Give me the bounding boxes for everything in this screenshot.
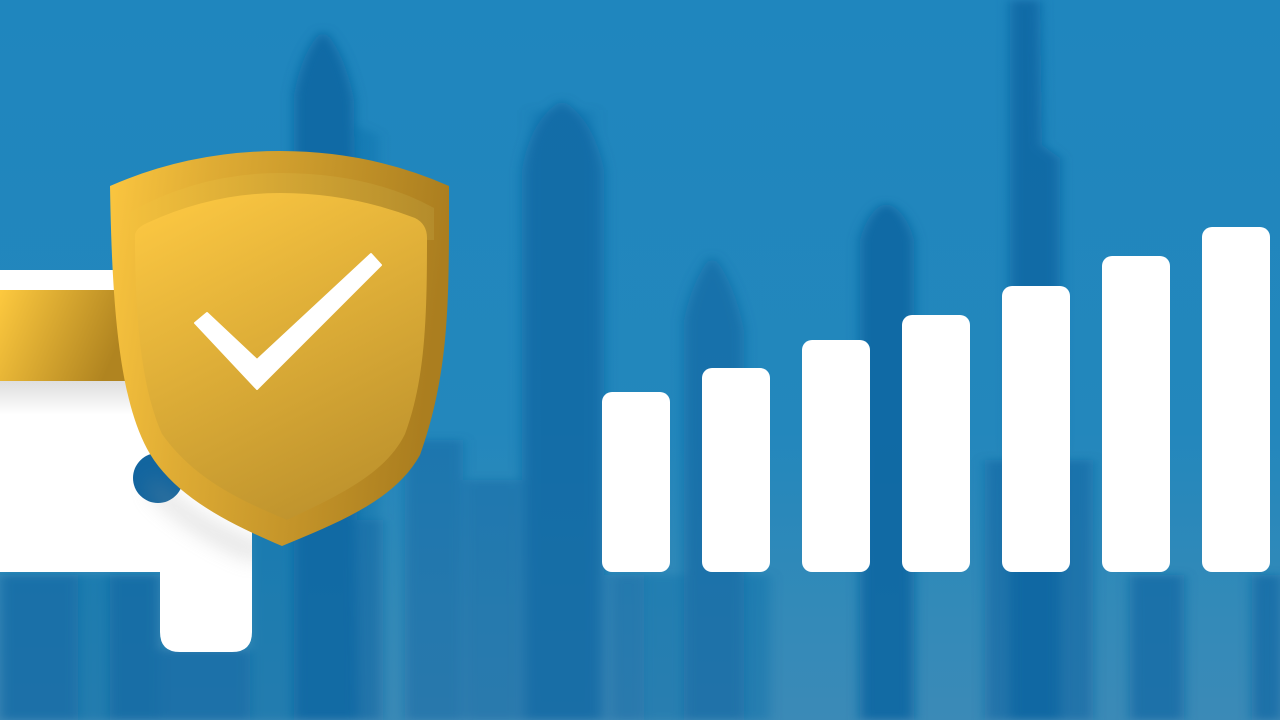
credit card — [0, 270, 282, 652]
shield top band — [130, 173, 434, 240]
card dot — [133, 453, 183, 503]
check mark — [195, 254, 381, 389]
shield — [110, 151, 449, 546]
bar chart — [602, 227, 1270, 572]
shield inner — [135, 193, 427, 520]
card shadow — [0, 381, 140, 415]
shield shadow on card — [146, 479, 252, 562]
card gold stripe — [0, 290, 130, 381]
